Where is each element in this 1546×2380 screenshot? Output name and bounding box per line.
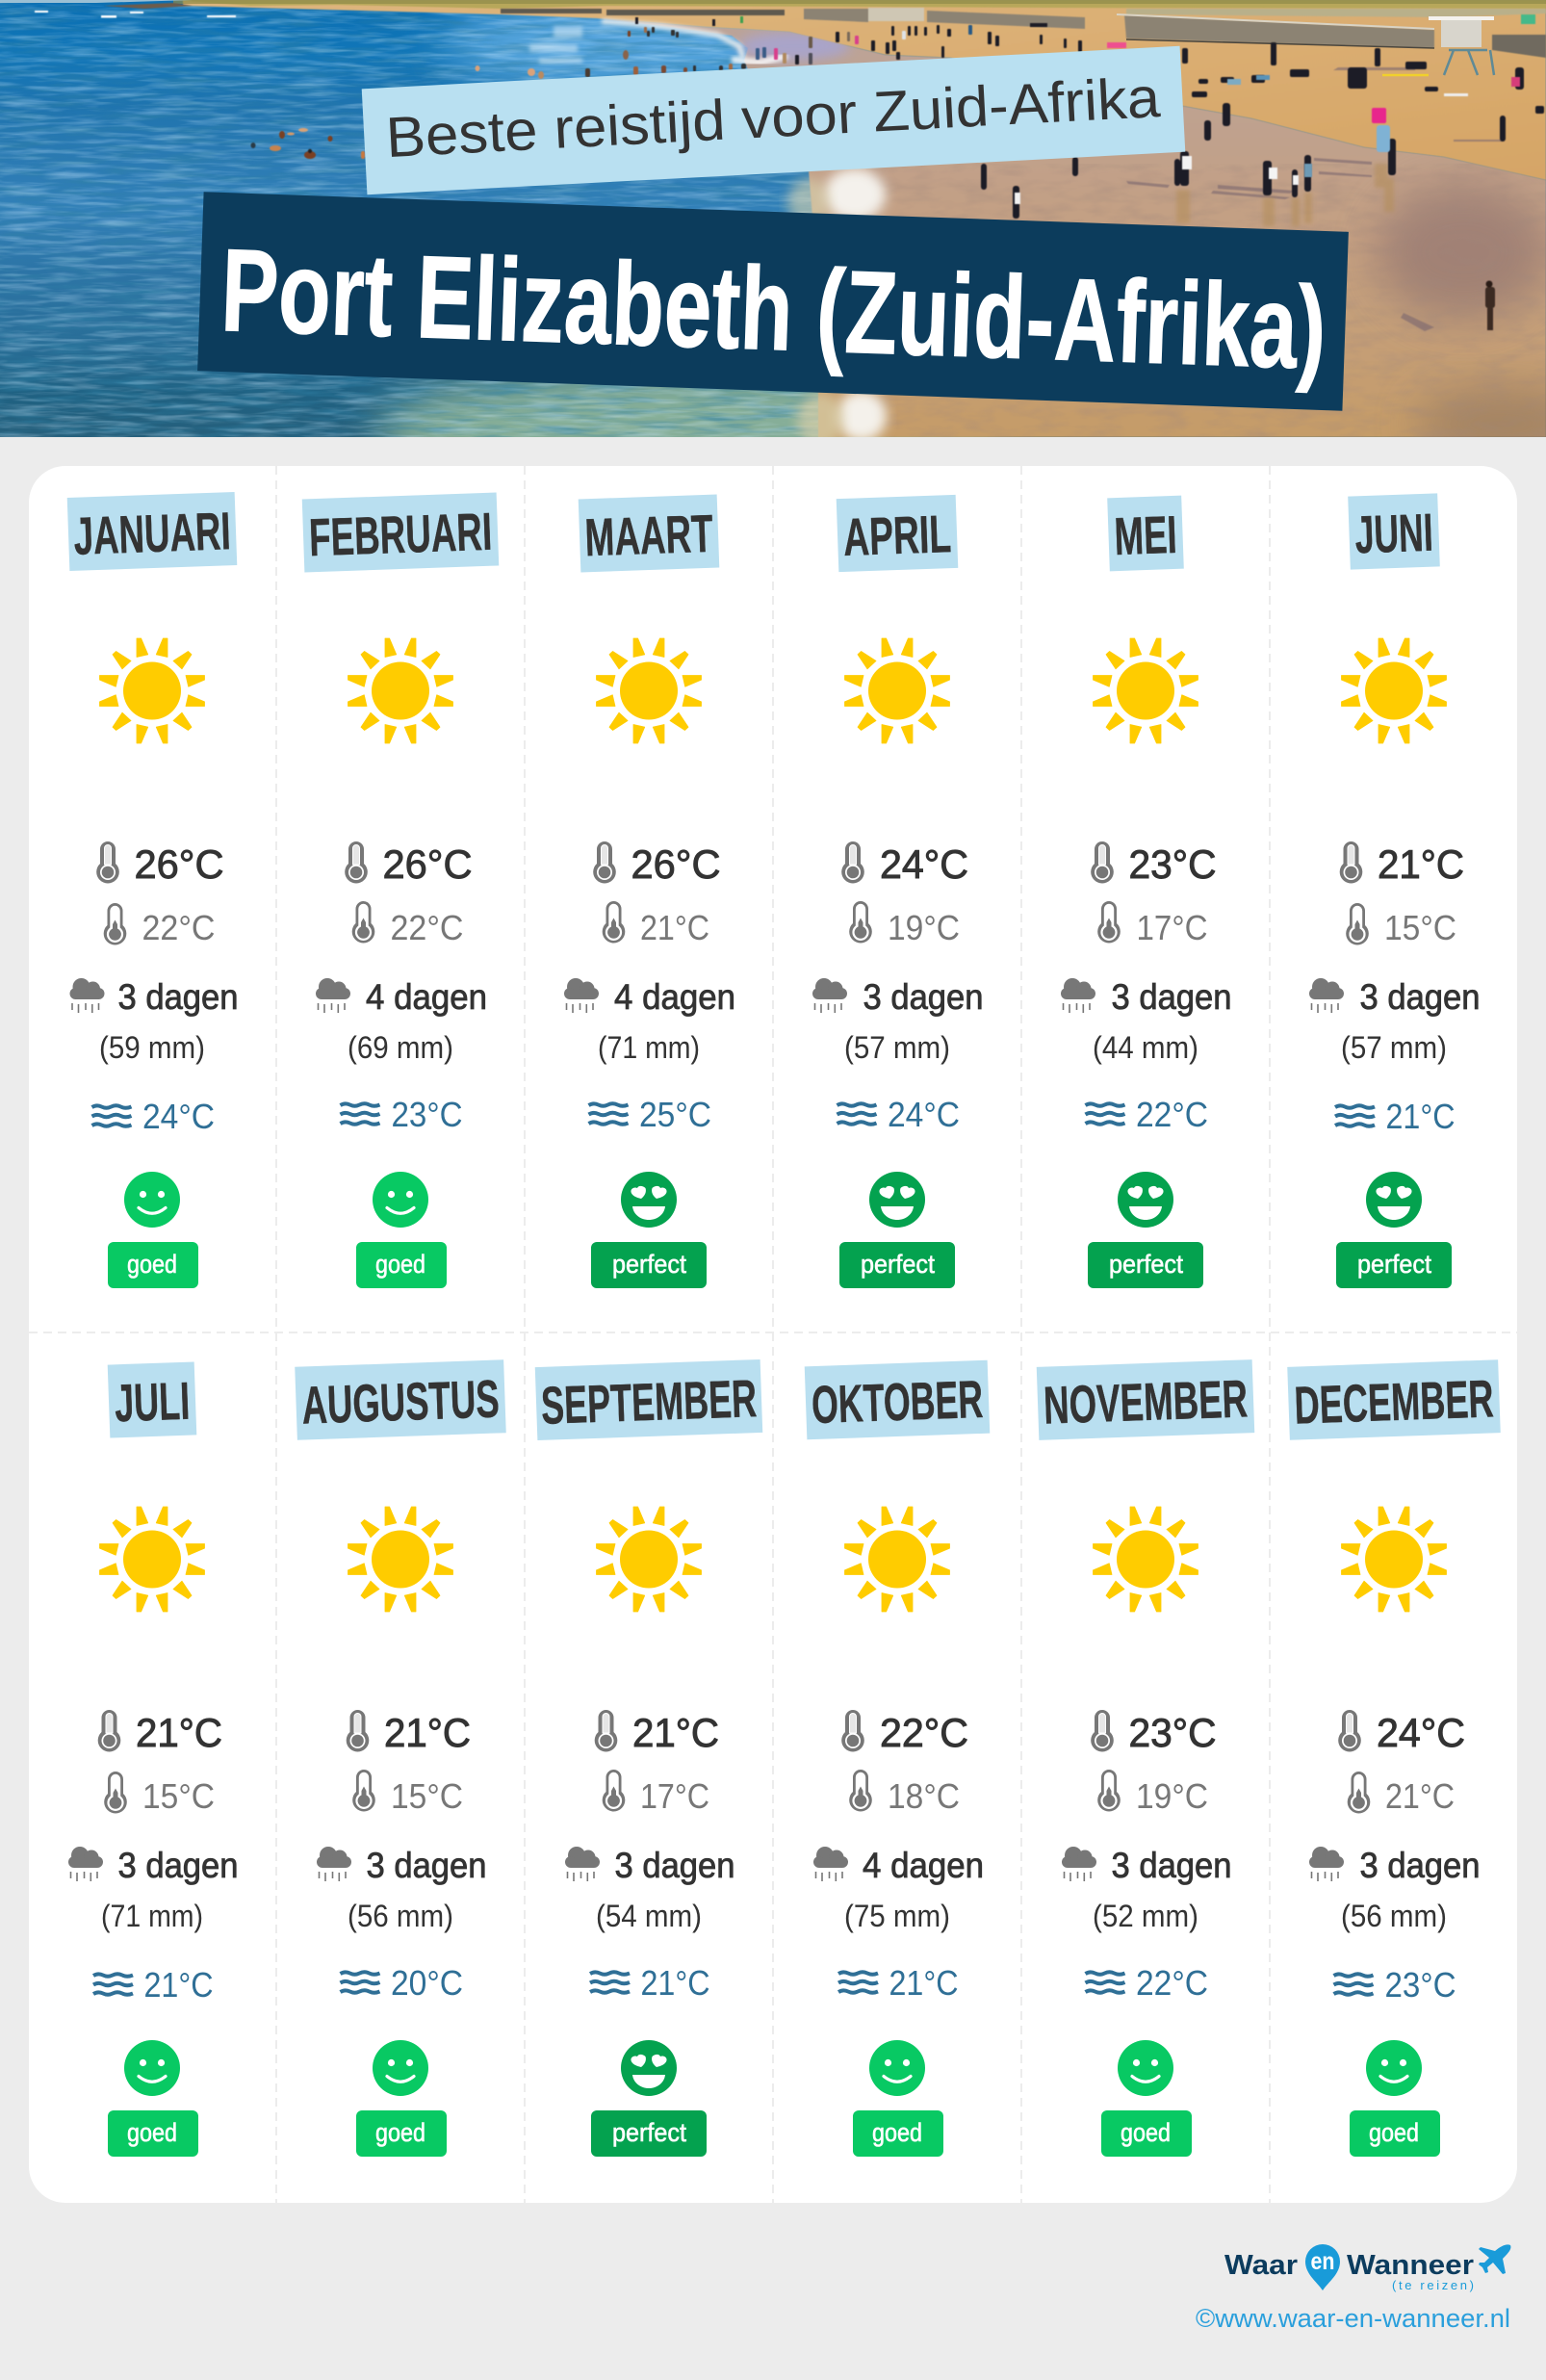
- icon: sun: [1094, 1507, 1198, 1612]
- rating: perfect: perfect: [612, 2118, 686, 2147]
- logo: Waar en Wanneer: (te reizen): [1392, 2278, 1474, 2292]
- rain days: [565, 1846, 735, 1885]
- icon: sun: [597, 1507, 701, 1612]
- minimum temperature: [352, 901, 464, 947]
- month label: [805, 1360, 990, 1439]
- maximum temperature: 23°C: [1128, 1710, 1217, 1755]
- maximum temperature: [841, 841, 968, 887]
- logo: Waar en Wanneer: Waar: [1224, 2250, 1298, 2281]
- rain days: 4 dagen: [863, 1846, 984, 1885]
- rainfall: (57 mm): [1341, 1030, 1447, 1065]
- rain days: 3 dagen: [863, 977, 984, 1017]
- month: maart: [564, 495, 735, 1288]
- icon: sun: [348, 638, 452, 743]
- rainfall: (44 mm): [1093, 1030, 1198, 1065]
- month label: [1348, 493, 1440, 570]
- month: januari: [67, 492, 239, 1288]
- month label: MAART: [584, 504, 714, 567]
- rating: goed: goed: [375, 2118, 425, 2147]
- water temperature: [590, 1963, 710, 2003]
- month: juli: [68, 1361, 239, 2157]
- minimum temperature: 21°C: [640, 908, 709, 947]
- rainfall: (71 mm): [598, 1030, 700, 1065]
- rain days: [813, 1846, 984, 1885]
- maximum temperature: [841, 1710, 968, 1755]
- maximum temperature: 21°C: [136, 1710, 222, 1755]
- month label: [108, 1361, 196, 1438]
- rain days: [1309, 977, 1481, 1017]
- rainfall: (69 mm): [348, 1030, 453, 1065]
- rain days: [564, 977, 735, 1017]
- rainfall: (71 mm): [101, 1899, 203, 1933]
- rating: goed: [853, 2040, 943, 2157]
- panel: monthly climate table: [29, 466, 1517, 2203]
- maximum temperature: [1091, 841, 1217, 887]
- rating: perfect: perfect: [1357, 1250, 1431, 1279]
- month: februari: [302, 492, 499, 1288]
- minimum temperature: 19°C: [888, 908, 960, 947]
- icon: sun: [845, 1507, 949, 1612]
- maximum temperature: 21°C: [632, 1710, 719, 1755]
- month: mei: [1061, 496, 1232, 1288]
- rating: goed: [356, 1172, 447, 1288]
- minimum temperature: 22°C: [391, 908, 464, 947]
- water temperature: 21°C: [641, 1963, 710, 2003]
- minimum temperature: [352, 1770, 463, 1816]
- minimum temperature: [1097, 1770, 1208, 1816]
- month label: [1107, 496, 1184, 571]
- month: juni: [1309, 493, 1481, 1288]
- minimum temperature: [1097, 901, 1207, 947]
- minimum temperature: 17°C: [1136, 908, 1207, 947]
- rating: perfect: [591, 2040, 707, 2157]
- maximum temperature: [1340, 841, 1464, 887]
- rating: perfect: perfect: [1109, 1250, 1183, 1279]
- water temperature: [92, 1097, 215, 1136]
- rating: goed: goed: [1369, 2118, 1419, 2147]
- minimum temperature: [104, 903, 216, 947]
- rain days: 3 dagen: [614, 1846, 735, 1885]
- minimum temperature: 22°C: [142, 908, 216, 947]
- minimum temperature: [1348, 1772, 1455, 1816]
- maximum temperature: [347, 1710, 471, 1755]
- icon: map pin: [1305, 2244, 1340, 2290]
- maximum temperature: 24°C: [880, 841, 968, 887]
- minimum temperature: [849, 901, 960, 947]
- water temperature: [838, 1963, 959, 2003]
- month label: NOVEMBER: [1043, 1368, 1249, 1436]
- month: november: [1037, 1359, 1254, 2157]
- maximum temperature: 23°C: [1128, 841, 1217, 887]
- maximum temperature: [345, 841, 472, 887]
- month label: [579, 495, 719, 572]
- water temperature: 21°C: [144, 1965, 214, 2005]
- rainfall: (75 mm): [844, 1899, 950, 1933]
- rating: perfect: [1088, 1172, 1203, 1288]
- water temperature: [93, 1965, 214, 2005]
- logo: Waar en Wanneer: Wanneer: [1347, 2250, 1474, 2281]
- rating: goed: goed: [375, 1250, 425, 1279]
- water temperature: 25°C: [639, 1095, 711, 1134]
- month: december: [1287, 1359, 1501, 2157]
- rain days: [316, 977, 487, 1017]
- swimmers: [250, 27, 746, 159]
- rain days: [1062, 1846, 1232, 1885]
- rain days: [812, 977, 984, 1017]
- subtitle banner: [362, 46, 1185, 194]
- rain days: 4 dagen: [366, 977, 487, 1017]
- water temperature: [589, 1095, 711, 1134]
- rainfall: (57 mm): [844, 1030, 950, 1065]
- rain days: 3 dagen: [1111, 1846, 1232, 1885]
- rain days: 4 dagen: [614, 977, 735, 1017]
- rating: perfect: [839, 1172, 955, 1288]
- month label: [535, 1359, 762, 1440]
- minimum temperature: 15°C: [1384, 908, 1456, 947]
- water temperature: [1086, 1963, 1208, 2003]
- water temperature: [1086, 1095, 1208, 1134]
- month label: JULI: [114, 1371, 191, 1433]
- rating: perfect: [591, 1172, 707, 1288]
- icon: plane: [1479, 2244, 1510, 2274]
- rating: goed: [1350, 2040, 1440, 2157]
- maximum temperature: 22°C: [880, 1710, 968, 1755]
- rating: perfect: perfect: [612, 1250, 686, 1279]
- water temperature: 22°C: [1136, 1095, 1208, 1134]
- maximum temperature: [1338, 1710, 1465, 1755]
- minimum temperature: 15°C: [142, 1776, 215, 1816]
- water temperature: 21°C: [889, 1963, 959, 2003]
- month label: [837, 495, 958, 572]
- maximum temperature: [96, 841, 223, 887]
- maximum temperature: 21°C: [384, 1710, 471, 1755]
- rating: goed: [108, 2040, 198, 2157]
- month label: JANUARI: [73, 501, 232, 566]
- rain days: 3 dagen: [1359, 977, 1481, 1017]
- month label: [1037, 1359, 1254, 1440]
- rating: goed: goed: [872, 2118, 922, 2147]
- rain days: 3 dagen: [366, 1846, 487, 1885]
- month: september: [535, 1359, 762, 2157]
- rain days: 3 dagen: [117, 977, 239, 1017]
- icon: sun: [100, 1507, 204, 1612]
- month label: [302, 492, 499, 573]
- month label: [295, 1359, 506, 1440]
- rain days: [69, 977, 239, 1017]
- month label: [67, 492, 237, 571]
- minimum temperature: 15°C: [391, 1776, 463, 1816]
- water temperature: [1335, 1097, 1456, 1136]
- minimum temperature: [603, 1770, 709, 1816]
- minimum temperature: 18°C: [888, 1776, 960, 1816]
- minimum temperature: 17°C: [640, 1776, 709, 1816]
- icon: sun: [1342, 1507, 1446, 1612]
- water temperature: 21°C: [1386, 1097, 1456, 1136]
- month label: JUNI: [1354, 503, 1434, 564]
- icon: map pin: en: [1311, 2248, 1334, 2275]
- month label: OKTOBER: [811, 1369, 984, 1435]
- rain days: [68, 1846, 239, 1885]
- icon: sun: [348, 1507, 452, 1612]
- logo: Waar en Wanneer: [1224, 2244, 1510, 2292]
- rating: goed: [356, 2040, 447, 2157]
- rain days: [1309, 1846, 1481, 1885]
- rating: goed: goed: [127, 1250, 177, 1279]
- rain days: 3 dagen: [1359, 1846, 1481, 1885]
- water temperature: 22°C: [1136, 1963, 1208, 2003]
- water temperature: 23°C: [1384, 1965, 1456, 2005]
- month label: MEI: [1114, 504, 1178, 566]
- rainfall: (56 mm): [348, 1899, 453, 1933]
- water temperature: [341, 1963, 463, 2003]
- minimum temperature: [1346, 903, 1456, 947]
- maximum temperature: [98, 1710, 222, 1755]
- header photo: beach: [0, 0, 1546, 437]
- month label: APRIL: [842, 504, 952, 567]
- rating: goed: [1101, 2040, 1192, 2157]
- month label: FEBRUARI: [308, 502, 493, 567]
- icon: sun: [1094, 638, 1198, 743]
- rain days: 3 dagen: [1111, 977, 1232, 1017]
- month: augustus: [295, 1359, 506, 2157]
- maximum temperature: [1091, 1710, 1217, 1755]
- icon: sun: [597, 638, 701, 743]
- month label: AUGUSTUS: [301, 1368, 501, 1436]
- rating: goed: [108, 1172, 198, 1288]
- subtitle banner: Beste reistijd voor Zuid-Afrika: [384, 65, 1162, 169]
- rating: perfect: perfect: [861, 1250, 935, 1279]
- maximum temperature: 26°C: [383, 841, 472, 887]
- water temperature: 24°C: [142, 1097, 215, 1136]
- rain days: [317, 1846, 487, 1885]
- maximum temperature: [593, 841, 720, 887]
- maximum temperature: 26°C: [135, 841, 223, 887]
- water temperature: 20°C: [391, 1963, 463, 2003]
- rating: perfect: [1336, 1172, 1452, 1288]
- minimum temperature: [104, 1772, 215, 1816]
- month: april: [812, 495, 984, 1288]
- maximum temperature: 24°C: [1377, 1710, 1465, 1755]
- icon: sun: [100, 638, 204, 743]
- water temperature: [837, 1095, 960, 1134]
- icon: sun: [1342, 638, 1446, 743]
- water temperature: [341, 1095, 462, 1134]
- rain days: 3 dagen: [117, 1846, 239, 1885]
- rating: goed: goed: [127, 2118, 177, 2147]
- minimum temperature: 21°C: [1385, 1776, 1455, 1816]
- rainfall: (56 mm): [1341, 1899, 1447, 1933]
- water temperature: 24°C: [888, 1095, 960, 1134]
- rainfall: (52 mm): [1093, 1899, 1198, 1933]
- minimum temperature: [603, 901, 709, 947]
- month label: SEPTEMBER: [540, 1368, 758, 1436]
- minimum temperature: [849, 1770, 960, 1816]
- maximum temperature: 26°C: [631, 841, 720, 887]
- rain days: [1061, 977, 1232, 1017]
- rainfall: (54 mm): [596, 1899, 702, 1933]
- beach people: [635, 16, 1544, 219]
- month: oktober: [805, 1360, 990, 2157]
- website credit: ©www.waar-en-wanneer.nl: [1196, 2304, 1510, 2333]
- minimum temperature: 19°C: [1136, 1776, 1208, 1816]
- icon: sun: [845, 638, 949, 743]
- rating: goed: goed: [1121, 2118, 1171, 2147]
- water temperature: 23°C: [391, 1095, 462, 1134]
- maximum temperature: [595, 1710, 719, 1755]
- water temperature: [1334, 1965, 1456, 2005]
- maximum temperature: 21°C: [1378, 841, 1464, 887]
- rainfall: (59 mm): [99, 1030, 205, 1065]
